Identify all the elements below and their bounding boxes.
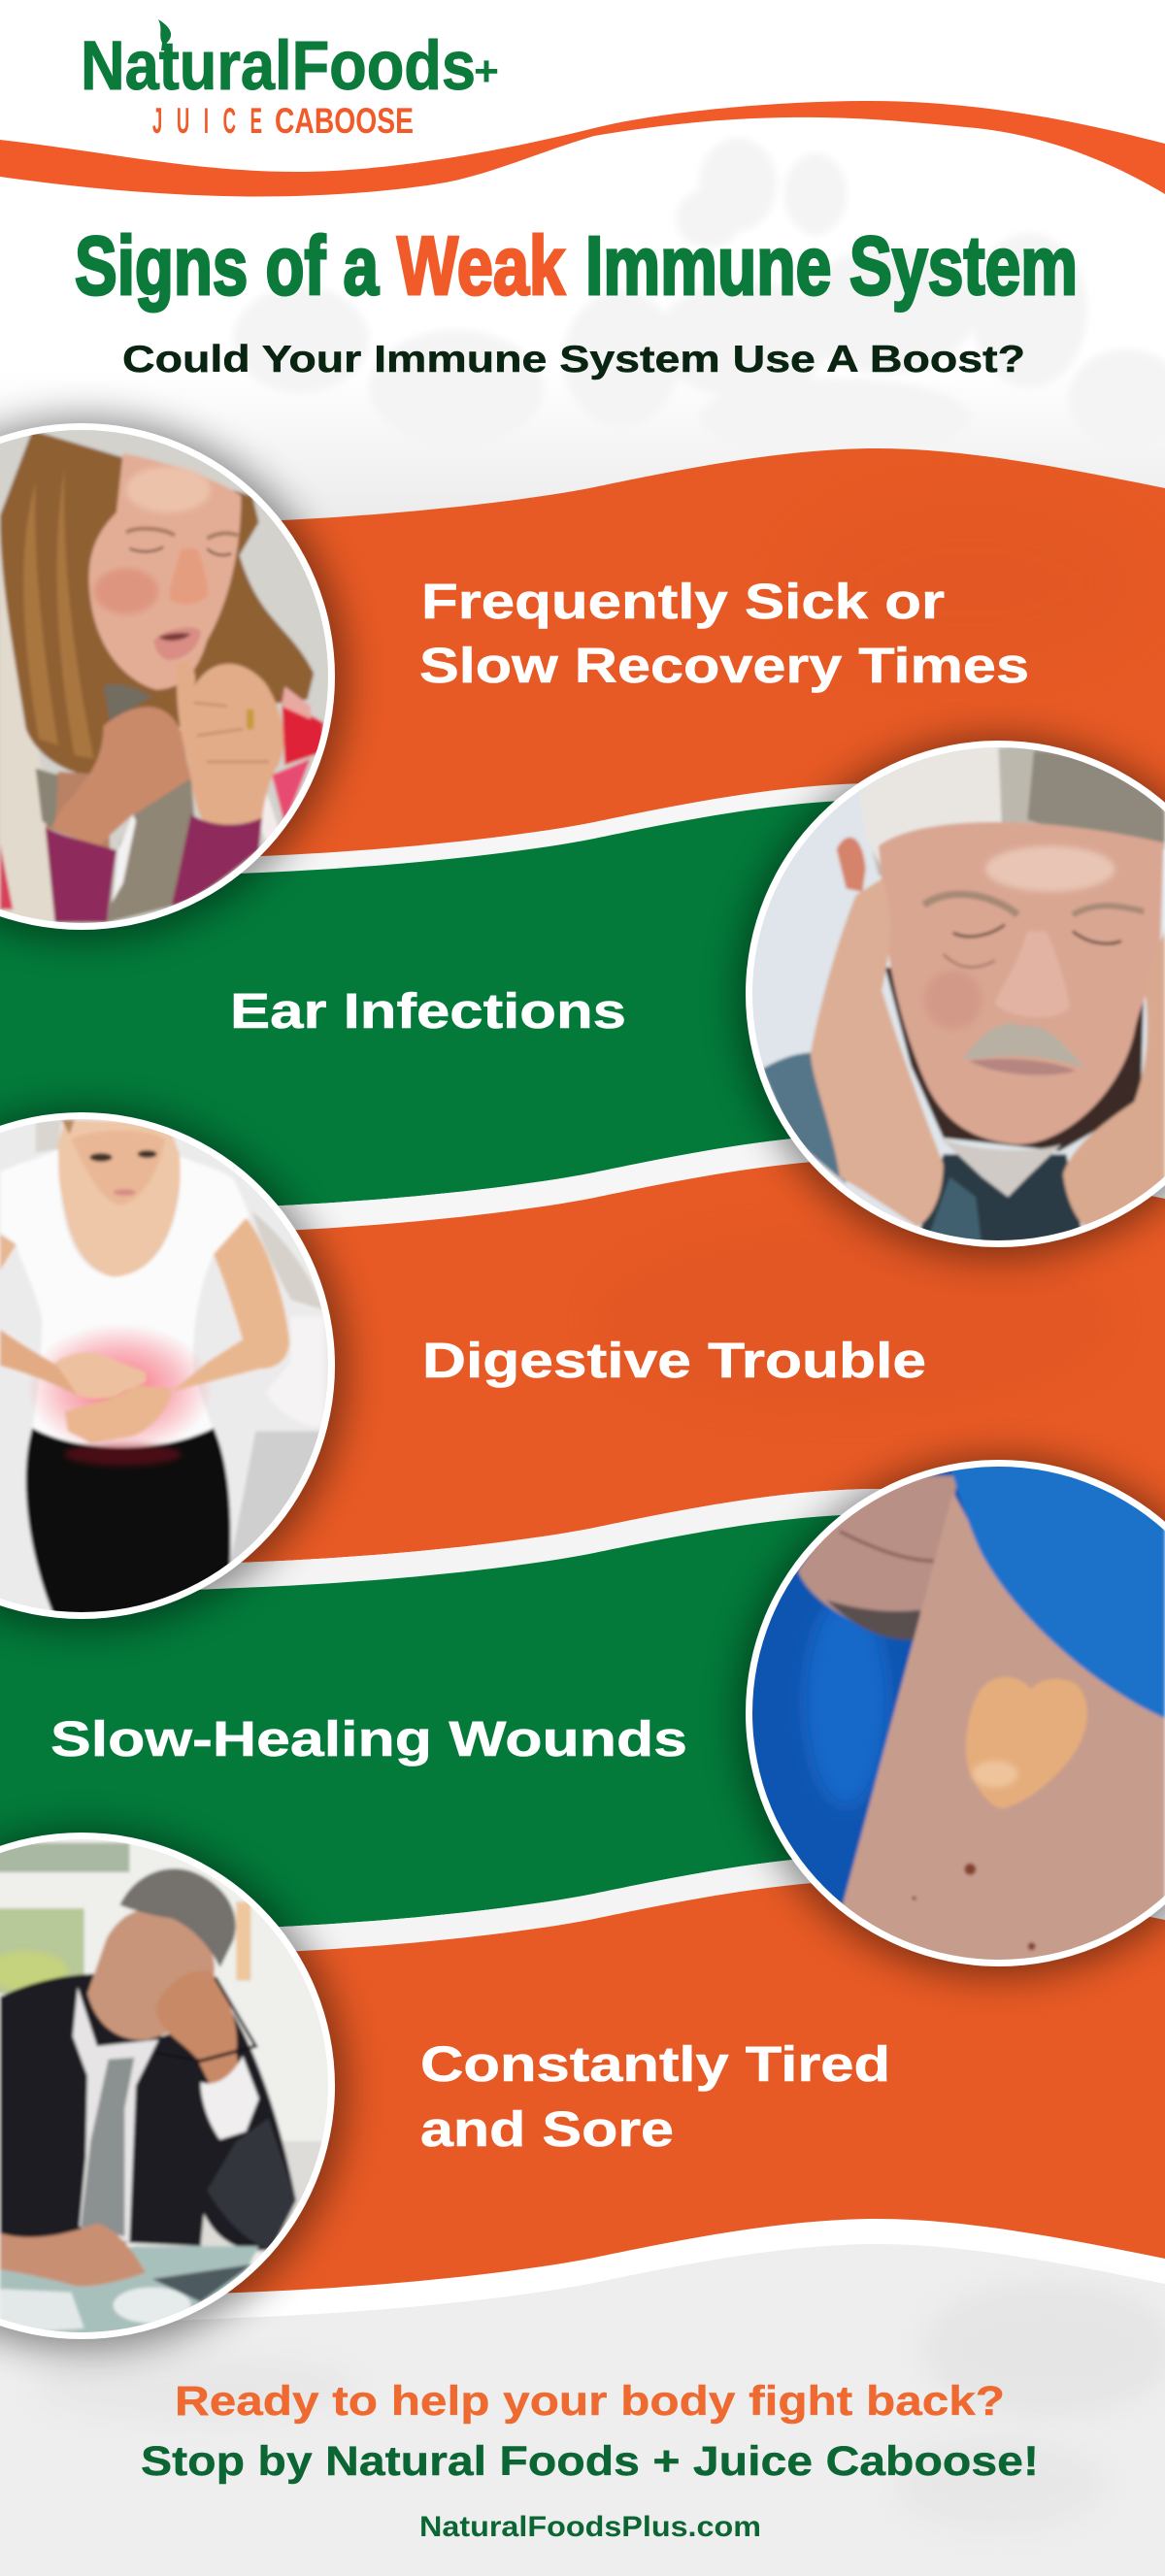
panel: frequently sick	[0, 448, 1165, 867]
logo subtitle juice: JUICE	[152, 102, 262, 142]
call to action line 2: Stop by Natural Foods + Juice Caboose!	[141, 2438, 1039, 2485]
title	[75, 220, 1078, 313]
icon: logo leaf	[158, 19, 171, 50]
panel: slow-healing wounds	[0, 1514, 1165, 1935]
divider: white wave 3	[0, 1489, 1165, 1602]
photo: tired businessman	[0, 1830, 356, 2355]
logo wordmark: NaturalFoods	[81, 28, 476, 105]
logo	[81, 19, 499, 142]
heading: slow-healing wounds: Slow-Healing Wounds	[50, 1711, 687, 1767]
photo: man holding ears	[739, 738, 1165, 1263]
panel: ear infections	[0, 800, 1165, 1214]
divider: white wave 4	[0, 1855, 1165, 1968]
divider: white wave 1	[0, 783, 1165, 893]
title: Weak	[397, 220, 566, 313]
footer background	[0, 2244, 1165, 2576]
heading: constantly tired: and Sore	[420, 2101, 674, 2157]
subtitle: Could Your Immune System Use A Boost?	[122, 339, 1025, 380]
photo: woman with stomach pain	[0, 1106, 356, 1632]
call to action line 1: Ready to help your body fight back?	[175, 2378, 1005, 2425]
panel: constantly tired	[0, 1880, 1165, 2299]
heading: ear infections: Ear Infections	[230, 983, 626, 1039]
photo: woman coughing	[0, 417, 356, 942]
heading: constantly tired	[420, 2036, 890, 2157]
heading: frequently sick: Frequently Sick or	[421, 574, 945, 629]
heading: digestive trouble: Digestive Trouble	[422, 1333, 926, 1388]
logo subtitle caboose: CABOOSE	[275, 101, 414, 141]
background: ghost fruit pattern in header	[0, 0, 1165, 544]
heading: frequently sick	[419, 574, 1029, 693]
heading: frequently sick: Slow Recovery Times	[419, 638, 1029, 693]
panel: digestive trouble	[0, 1159, 1165, 1569]
heading: constantly tired: Constantly Tired	[420, 2036, 890, 2092]
website: NaturalFoodsPlus.com	[419, 2511, 761, 2543]
photo: arm with heart bandage	[739, 1456, 1165, 1981]
divider: white wave 2	[0, 1134, 1165, 1247]
title: Signs of a	[75, 220, 380, 313]
header orange wave	[0, 101, 1165, 196]
logo plus: +	[474, 48, 499, 95]
